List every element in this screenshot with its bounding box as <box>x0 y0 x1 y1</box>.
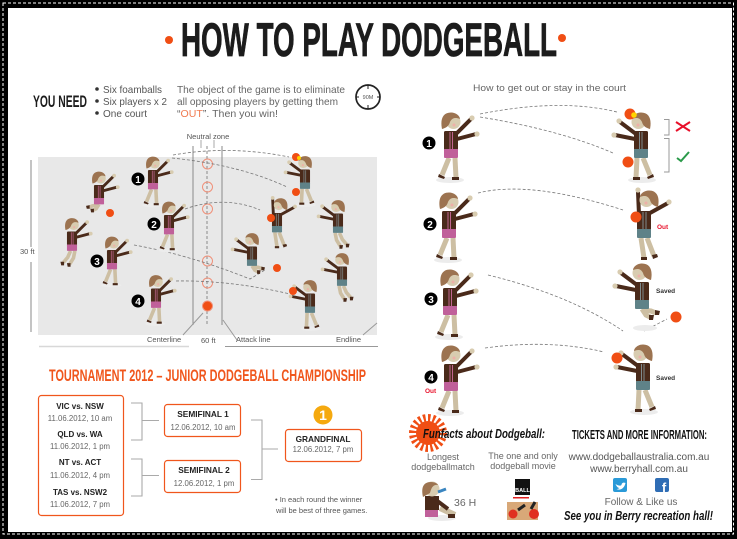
scenario 2: Out <box>657 224 669 231</box>
game objective text <box>177 84 345 120</box>
scenario 1: 1 <box>426 139 432 150</box>
neutral zone label: Neutral zone <box>187 132 229 141</box>
court lines <box>193 140 222 325</box>
icon: 90 minute clock: 90M <box>363 95 374 101</box>
fact: longest match: dodgeballmatch <box>411 462 475 472</box>
game objective text: all opposing players by getting them <box>177 96 338 108</box>
game objective text: The object of the game is to eliminate <box>177 84 345 96</box>
fact: longest match: Longest <box>427 452 460 462</box>
icon: facebook: f <box>662 480 667 495</box>
balls <box>106 153 301 295</box>
scenario 2: 2 <box>427 220 433 231</box>
movie poster <box>507 479 539 520</box>
right panel heading: How to get out or stay in the court <box>473 83 626 94</box>
game objective text: “OUT”. Then you win! <box>177 108 278 120</box>
semifinal 2: 12.06.2012, 1 pm <box>174 479 234 488</box>
icon: twitter <box>613 478 627 492</box>
court floor <box>38 157 377 335</box>
throw paths <box>134 150 290 294</box>
funfacts heading with starburst: Funfacts about Dodgeball: <box>423 426 545 441</box>
scenario 2 <box>424 187 672 263</box>
bracket: first round: 11.06.2012, 4 pm <box>50 471 110 480</box>
scenario 4 <box>424 344 675 416</box>
bracket: first round: QLD vs. WA <box>57 430 103 439</box>
grand final: 12.06.2012, 7 pm <box>293 445 353 454</box>
fact: movie <box>488 451 558 471</box>
dimension 60 ft and labels: Attack line <box>236 335 271 344</box>
scenario 4: Out <box>425 388 437 395</box>
semifinal 1: 12.06.2012, 10 am <box>170 423 236 432</box>
fact: longest match <box>411 452 475 472</box>
number badges: 3 <box>94 257 100 268</box>
scenario 4: 4 <box>428 373 434 384</box>
fact: movie: dodgeball movie <box>490 461 556 471</box>
websites: www.dodgeballaustralia.com.au <box>568 452 709 463</box>
court diagram <box>20 132 378 346</box>
semifinal 1: SEMIFINAL 1 <box>177 409 229 419</box>
icon: sitting player drinking <box>422 482 456 521</box>
semifinal 1 <box>164 404 240 436</box>
websites <box>568 452 709 475</box>
funfacts heading with starburst <box>414 418 545 448</box>
fact: 36 H: 36 H <box>454 497 476 509</box>
bracket: first round: 11.06.2012, 10 am <box>48 414 112 423</box>
scenario 3: 3 <box>428 295 434 306</box>
number badges: 4 <box>135 297 141 308</box>
round note <box>275 495 367 515</box>
fact: movie: The one and only <box>488 451 558 461</box>
number badges: 1 <box>135 175 141 186</box>
scenario 3 <box>424 264 682 340</box>
player boys <box>284 156 316 207</box>
dimension 60 ft and labels: Endline <box>336 335 361 344</box>
semifinal 2 <box>164 460 240 492</box>
bracket: first round: TAS vs. NSW2 <box>53 488 108 497</box>
title <box>165 13 566 66</box>
equipment list: One court <box>103 108 147 120</box>
scenario 3: Saved <box>656 288 675 295</box>
bracket: first round: 11.06.2012, 1 pm <box>50 442 110 451</box>
bracket connectors <box>131 403 278 496</box>
bracket: first round: NT vs. ACT <box>59 458 101 467</box>
icon: facebook <box>655 478 669 495</box>
equipment list <box>95 84 167 120</box>
scenario 1 <box>422 105 690 183</box>
round note: • In each round the winner <box>275 495 363 504</box>
number badges <box>90 172 160 308</box>
scenario 4: Saved <box>656 375 675 382</box>
player girls <box>142 157 174 207</box>
round note: will be best of three games. <box>275 506 367 515</box>
brackets and verdict marks <box>664 120 690 172</box>
bracket: first round <box>38 396 124 516</box>
icon: 90 minute clock <box>356 85 380 109</box>
semifinal 2: SEMIFINAL 2 <box>178 465 230 475</box>
movie poster: BALL <box>515 488 530 494</box>
follow text: Follow & Like us <box>605 497 677 508</box>
bracket: first round: 11.06.2012, 7 pm <box>50 500 110 509</box>
equipment list: Six foamballs <box>103 84 162 96</box>
grand final: GRANDFINAL <box>296 434 350 444</box>
tournament heading: TOURNAMENT 2012 – JUNIOR DODGEBALL CHAMPIONSHIP <box>49 366 366 385</box>
dimension 60 ft and labels: Centerline <box>147 335 181 344</box>
equipment list: Six players x 2 <box>103 96 167 108</box>
grand final: 1 <box>319 407 327 423</box>
bracket: first round: VIC vs. NSW <box>56 402 104 411</box>
you need heading: YOU NEED <box>33 93 87 111</box>
number badges: 2 <box>151 220 157 231</box>
websites: www.berryhall.com.au <box>589 464 688 475</box>
dimension 60 ft and labels <box>39 313 378 346</box>
grand final <box>286 406 362 462</box>
dimension 30 ft: 30 ft <box>20 247 36 256</box>
dimension 60 ft and labels: 60 ft <box>201 336 217 345</box>
